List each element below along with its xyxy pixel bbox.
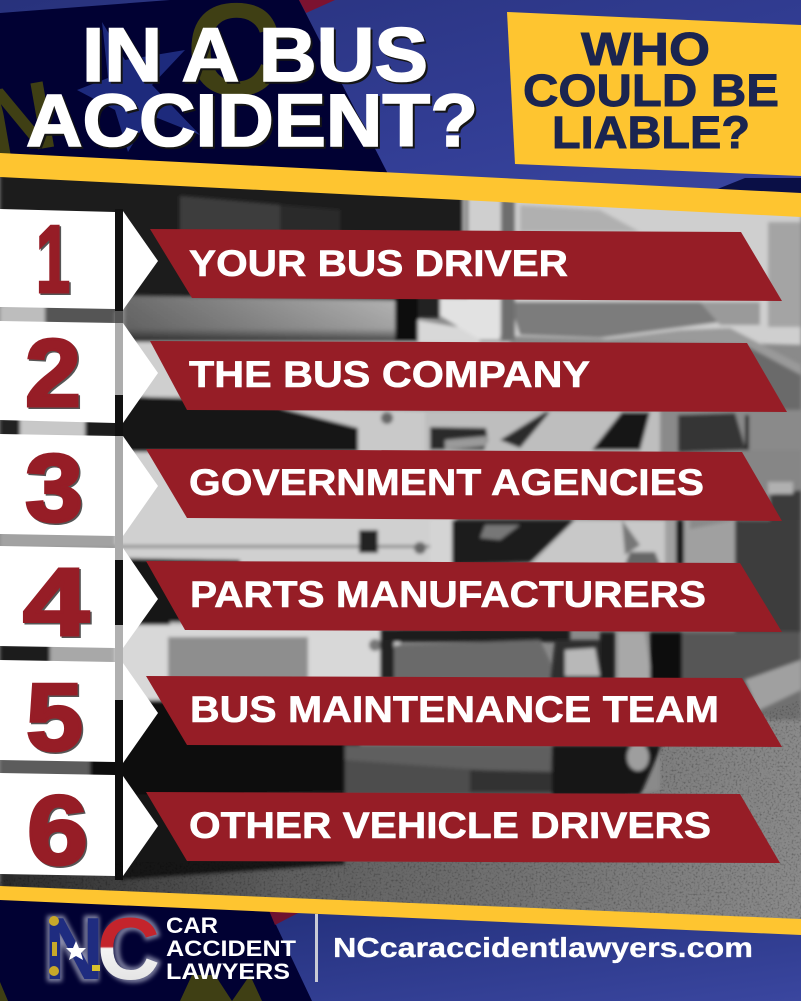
- front bumper and wheel: [380, 628, 570, 642]
- item 2: the bus company: 2: [26, 322, 82, 428]
- callout: who could be liable: COULD BE: [523, 65, 779, 116]
- item 3: government agencies: 3: [25, 435, 83, 542]
- item 5: bus maintenance team: BUS MAINTENANCE TEAM: [190, 689, 719, 730]
- header background: North Carolina flag: [0, 0, 801, 205]
- item 6: other vehicle drivers: 6: [28, 776, 90, 886]
- item 4: parts manufacturers: PARTS MANUFACTURERS: [190, 574, 706, 615]
- item 3: government agencies: 3: [26, 436, 84, 544]
- engine bay: [0, 170, 470, 312]
- item 1: your bus driver: 1: [38, 208, 72, 314]
- item 2: the bus company: 2: [25, 320, 81, 427]
- item 5: bus maintenance team: 5: [28, 666, 84, 772]
- logo mark: C: [97, 899, 160, 998]
- item 2: the bus company: [0, 320, 787, 428]
- callout: who could be liable: WHO: [581, 23, 710, 75]
- crash damage: [430, 520, 454, 565]
- crumpled fender and windshield: [425, 410, 660, 455]
- item 4: parts manufacturers: 4: [23, 549, 89, 656]
- lower dark zone: [115, 700, 345, 880]
- yellow diagonal stripe top: [0, 153, 801, 217]
- callout: who could be liable: [507, 12, 801, 176]
- bumper lower and tyre: [345, 745, 552, 795]
- logo wordmark: CAR: [166, 913, 218, 938]
- item 6: other vehicle drivers: [0, 773, 780, 886]
- sky: [468, 180, 801, 345]
- item 1: your bus driver: [0, 206, 782, 314]
- logo mark: NC: [44, 899, 160, 998]
- background photo: bus and car collision: [0, 165, 801, 945]
- item 3: government agencies: GOVERNMENT AGENCIES: [189, 462, 704, 503]
- yellow diagonal stripe bottom: [0, 886, 801, 935]
- title: IN A BUS: [84, 15, 430, 100]
- bus bumper and body: [125, 296, 395, 342]
- title: ACCIDENT?: [28, 81, 480, 164]
- strip between boxes and arrows: [115, 209, 123, 312]
- logo: NC Car Accident Lawyers: LAWYERS: [166, 959, 290, 984]
- title: IN A BUS: [82, 13, 428, 98]
- item 2: the bus company: THE BUS COMPANY: [189, 354, 590, 395]
- logo mark: N: [44, 899, 104, 998]
- gaps between number boxes: [0, 305, 45, 325]
- item 4: parts manufacturers: [0, 546, 782, 658]
- footer background: flag: [0, 895, 801, 1001]
- item 4: parts manufacturers: 4: [24, 550, 90, 658]
- callout: who could be liable: LIABLE?: [552, 107, 750, 158]
- divider: [315, 914, 318, 982]
- item 5: bus maintenance team: [0, 660, 782, 772]
- logo: NC Car Accident Lawyers: [44, 899, 297, 998]
- shadow under bus skirt: [115, 558, 240, 630]
- logo: NC Car Accident Lawyers: ACCIDENT: [166, 936, 297, 961]
- item 3: government agencies: [0, 434, 782, 544]
- website url: NCcaraccidentlawyers.com: [333, 932, 753, 963]
- title: [26, 13, 480, 164]
- road: [0, 700, 801, 945]
- item 6: other vehicle drivers: OTHER VEHICLE DRIVERS: [189, 805, 711, 846]
- item 5: bus maintenance team: 5: [26, 664, 83, 771]
- dark band on bus: [115, 395, 358, 452]
- right side of car: [740, 450, 801, 525]
- title: ACCIDENT?: [26, 79, 478, 162]
- item 1: your bus driver: 1: [36, 206, 70, 313]
- item 6: other vehicle drivers: 6: [27, 775, 88, 885]
- car roof and door: [600, 328, 801, 420]
- item 1: your bus driver: YOUR BUS DRIVER: [189, 243, 568, 284]
